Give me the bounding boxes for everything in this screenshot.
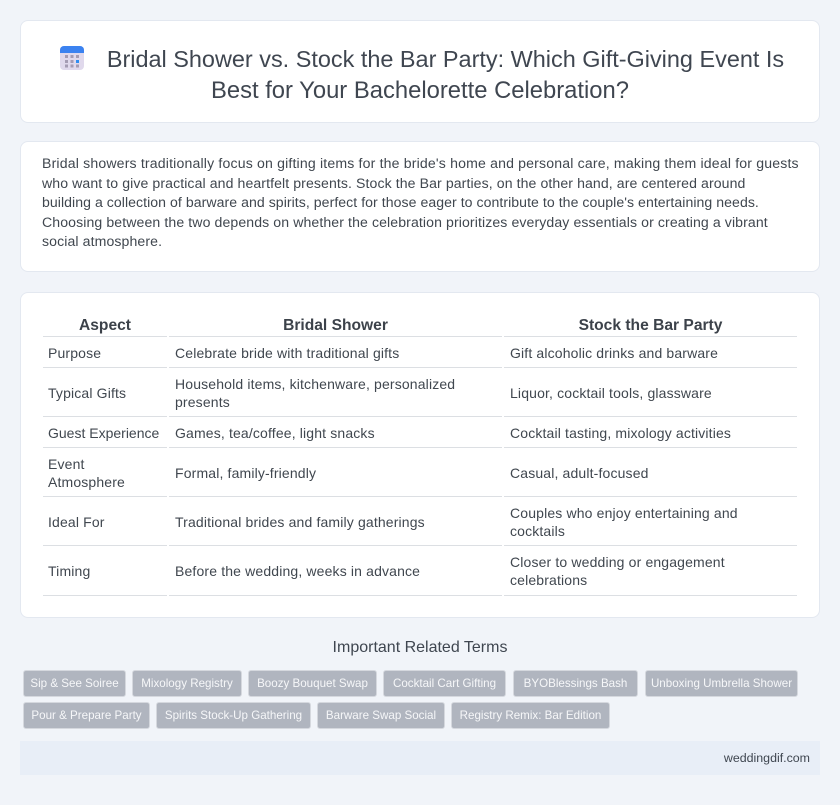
guest experience: bridal shower: Games, tea/coffee, light snacks [175, 425, 375, 441]
tag [132, 670, 242, 697]
row: event atmosphere [48, 456, 125, 490]
row: event atmosphere: Atmosphere [48, 474, 125, 490]
tag [451, 702, 610, 729]
intro text: Bridal showers traditionally focus on gifting items for the bride's home and personal care, making them ideal for guests [42, 155, 799, 171]
intro text: building a collection of barware and spirits, perfect for those eager to contribute to the couple's entertaining needs. [42, 194, 759, 210]
intro text: social atmosphere. [42, 233, 162, 249]
tag [156, 702, 311, 729]
tag: Mixology Registry [141, 677, 233, 690]
related terms heading: Important Related Terms [333, 639, 507, 656]
event atmosphere: stock the bar: Casual, adult-focused [510, 465, 649, 481]
row: guest experience: Guest Experience [48, 425, 159, 441]
typical gifts: stock the bar: Liquor, cocktail tools, glassware [510, 385, 712, 401]
typical gifts: bridal shower: presents [175, 394, 230, 410]
intro text: Choosing between the two depends on whether the celebration prioritizes everyday essentials or creating a vibrant [42, 214, 768, 230]
row: typical gifts: Typical Gifts [48, 385, 126, 401]
footer source: weddingdif.com [724, 751, 810, 765]
tag: Spirits Stock-Up Gathering [165, 709, 302, 722]
header panel [20, 20, 820, 123]
footer bar [20, 741, 820, 775]
tag: Cocktail Cart Gifting [393, 677, 496, 690]
ideal for: stock the bar: cocktails [510, 523, 565, 539]
row: event atmosphere: Event [48, 456, 85, 472]
timing: bridal shower: Before the wedding, weeks in advance [175, 563, 420, 579]
typical gifts: bridal shower: Household items, kitchenware, personalized [175, 376, 455, 392]
table header: stock the bar party: Stock the Bar Party [579, 317, 722, 334]
row: ideal for: Ideal For [48, 514, 105, 530]
tag [23, 670, 126, 697]
tag: Barware Swap Social [326, 709, 436, 722]
table header: aspect: Aspect [79, 317, 131, 334]
intro text [42, 155, 799, 249]
guest experience: stock the bar: Cocktail tasting, mixology activities [510, 425, 731, 441]
tag: Boozy Bouquet Swap [257, 677, 368, 690]
ideal for: bridal shower: Traditional brides and family gatherings [175, 514, 425, 530]
ideal for: stock the bar: Couples who enjoy entertaining and [510, 505, 738, 521]
tag: Pour & Prepare Party [31, 709, 142, 722]
row: purpose: Purpose [48, 345, 101, 361]
intro text: who want to give practical and heartfelt presents. Stock the Bar parties, on the other hand, are centered around [42, 175, 745, 191]
title: Best for Your Bachelorette Celebration? [211, 77, 629, 104]
comparison table panel [20, 292, 820, 618]
tag [383, 670, 506, 697]
ideal for: stock the bar [510, 505, 738, 539]
table header: bridal shower: Bridal Shower [283, 317, 388, 334]
tag: Unboxing Umbrella Shower [651, 677, 792, 690]
tag [317, 702, 445, 729]
tag [23, 702, 150, 729]
intro panel [20, 141, 820, 272]
tag: BYOBlessings Bash [524, 677, 627, 690]
row: timing: Timing [48, 563, 90, 579]
icon: calendar [60, 46, 84, 70]
tag [513, 670, 638, 697]
tag [645, 670, 798, 697]
timing: stock the bar [510, 554, 725, 588]
purpose: bridal shower: Celebrate bride with traditional gifts [175, 345, 399, 361]
tag: Registry Remix: Bar Edition [460, 709, 601, 722]
title [107, 46, 784, 104]
typical gifts: bridal shower [175, 376, 455, 410]
event atmosphere: bridal shower: Formal, family-friendly [175, 465, 316, 481]
tag: Sip & See Soiree [30, 677, 119, 690]
tag [248, 670, 377, 697]
title: Bridal Shower vs. Stock the Bar Party: Which Gift-Giving Event Is [107, 46, 784, 72]
timing: stock the bar: celebrations [510, 572, 587, 588]
timing: stock the bar: Closer to wedding or engagement [510, 554, 725, 570]
purpose: stock the bar: Gift alcoholic drinks and barware [510, 345, 718, 361]
